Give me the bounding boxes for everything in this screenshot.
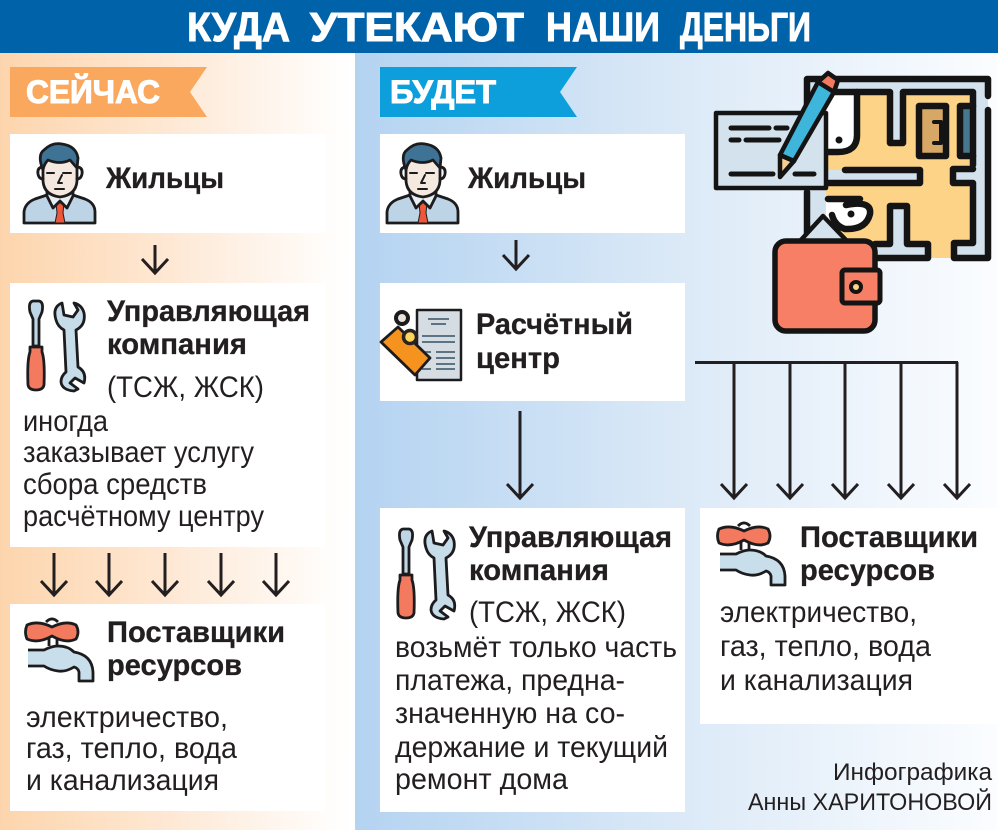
description: электричество, bbox=[26, 701, 228, 734]
icon: tools bbox=[28, 301, 85, 391]
box: management company: (ТСЖ, ЖСК) bbox=[469, 596, 626, 629]
icon: document with tag bbox=[381, 310, 461, 380]
icon: person bbox=[24, 144, 95, 223]
description: сбора средств bbox=[23, 468, 207, 501]
labels: Расчётный bbox=[476, 308, 633, 341]
credit bbox=[748, 759, 993, 816]
box: suppliers bbox=[700, 508, 998, 724]
icon: tap bbox=[718, 523, 785, 585]
description: ремонт дома bbox=[395, 763, 568, 796]
labels: Управляющая bbox=[469, 521, 672, 554]
pencil bbox=[780, 73, 838, 177]
title: КУДА bbox=[187, 4, 290, 50]
description: расчётному центру bbox=[23, 500, 264, 533]
description: электричество, bbox=[720, 596, 917, 629]
panel: now bbox=[10, 67, 325, 811]
box: settlement centre: центр bbox=[476, 342, 560, 375]
box: settlement centre bbox=[380, 283, 685, 401]
label: Жильцы bbox=[467, 162, 586, 195]
arrow bbox=[503, 240, 529, 269]
title: ДЕНЬГИ bbox=[680, 4, 811, 50]
floor plan bbox=[807, 78, 988, 258]
title: УТЕКАЮТ bbox=[310, 4, 524, 50]
labels: Управляющая bbox=[107, 295, 310, 328]
box: management company bbox=[10, 283, 325, 547]
wallet bbox=[775, 216, 880, 331]
description: газ, тепло, вода bbox=[26, 732, 237, 765]
box: residents bbox=[380, 134, 685, 233]
box: residents bbox=[10, 134, 325, 233]
arrows: five down bbox=[41, 553, 289, 595]
box: management company: (ТСЖ, ЖСК) bbox=[107, 371, 264, 404]
box: management company: компания bbox=[107, 328, 247, 361]
cheque bbox=[716, 113, 826, 188]
ribbon: now bbox=[10, 67, 207, 117]
ribbon: future: БУДЕТ bbox=[390, 74, 496, 110]
illustration: floor plan, cheque, pencil, wallet bbox=[716, 73, 988, 331]
credit: Инфографика bbox=[833, 759, 993, 786]
icon: tap bbox=[26, 619, 93, 681]
description: и канализация bbox=[720, 664, 913, 697]
description: иногда bbox=[23, 405, 108, 438]
box: suppliers bbox=[10, 604, 325, 811]
description bbox=[23, 405, 264, 533]
description bbox=[395, 631, 677, 796]
description: заказывает услугу bbox=[23, 436, 254, 469]
description bbox=[720, 596, 931, 697]
description: значенную на со- bbox=[395, 697, 625, 730]
arrow bbox=[142, 245, 168, 273]
box: suppliers: ресурсов bbox=[107, 649, 242, 682]
ribbon: future bbox=[380, 67, 577, 117]
ribbon: now: СЕЙЧАС bbox=[26, 74, 160, 110]
box: suppliers: ресурсов bbox=[800, 554, 935, 587]
description: и канализация bbox=[26, 764, 219, 797]
icon: tools bbox=[398, 529, 455, 619]
title: НАШИ bbox=[546, 4, 660, 50]
labels: Поставщики bbox=[107, 616, 285, 649]
background: left panel bbox=[0, 53, 355, 830]
icon: person bbox=[387, 144, 458, 223]
box: management company: компания bbox=[469, 554, 609, 587]
labels: Поставщики bbox=[800, 521, 978, 554]
arrow bbox=[507, 411, 533, 498]
description: держание и текущий bbox=[395, 731, 668, 764]
description: возьмёт только часть bbox=[395, 631, 677, 664]
arrows: bracket with five down bbox=[695, 362, 970, 498]
description: газ, тепло, вода bbox=[720, 630, 931, 663]
title bbox=[0, 0, 998, 53]
label: Жильцы bbox=[105, 162, 224, 195]
credit: Анны ХАРИТОНОВОЙ bbox=[748, 788, 992, 816]
background: right panel bbox=[355, 53, 998, 830]
description bbox=[26, 701, 237, 797]
description: платежа, предна- bbox=[395, 664, 625, 697]
panel: future bbox=[380, 67, 998, 816]
box: management company bbox=[380, 508, 685, 812]
